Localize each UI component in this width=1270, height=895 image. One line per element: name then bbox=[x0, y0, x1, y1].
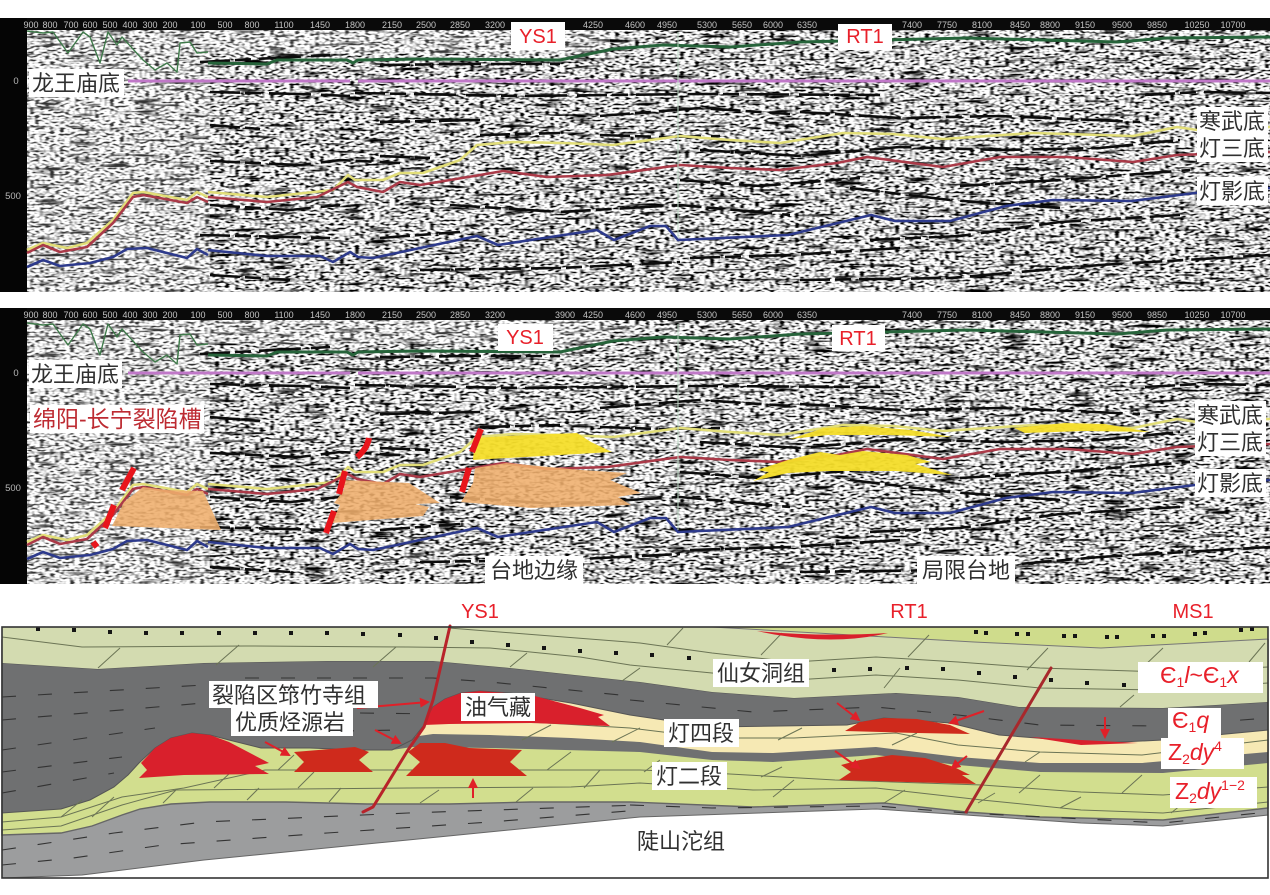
axis numbers lower: 500 bbox=[102, 310, 118, 320]
axis numbers lower: 500 bbox=[217, 310, 233, 320]
lithology lines bbox=[2, 628, 1268, 830]
axis numbers upper: 1100 bbox=[274, 20, 294, 30]
formula: Z2dy4 bbox=[1161, 738, 1244, 769]
label dengsan upper: 灯三底 bbox=[1199, 136, 1265, 161]
migration arrows bbox=[265, 702, 1105, 798]
formula: Z2dy4: 2 bbox=[1182, 751, 1190, 767]
axis numbers upper: 100 bbox=[190, 20, 206, 30]
axis numbers lower: 200 bbox=[162, 310, 178, 320]
formula: Z2dy1-2: Z bbox=[1175, 778, 1189, 804]
axis numbers upper: 7400 bbox=[902, 20, 922, 30]
red fault segments bbox=[93, 429, 481, 547]
formula: Qiongzhusi: 1 bbox=[1189, 719, 1197, 735]
frame bbox=[2, 627, 1268, 878]
axis numbers upper: 6350 bbox=[797, 20, 817, 30]
axis numbers lower: 400 bbox=[122, 310, 138, 320]
label longwangmiao lower: 龙王庙底 bbox=[31, 362, 119, 387]
axis numbers upper: 8450 bbox=[1010, 20, 1030, 30]
axis numbers upper: 10700 bbox=[1220, 20, 1246, 30]
formula: Qiongzhusi: q bbox=[1196, 707, 1209, 733]
label longwangmiao upper: 龙王庙底 bbox=[32, 71, 120, 96]
shale dashes bbox=[2, 678, 1268, 865]
well label YS1 lower: YS1 bbox=[506, 327, 544, 349]
well label YS1 upper bbox=[511, 22, 565, 50]
axis numbers lower: 800 bbox=[244, 310, 260, 320]
well label MS1 section: MS1 bbox=[1172, 601, 1214, 623]
axis numbers upper: 4950 bbox=[657, 20, 677, 30]
label hanwu lower: 寒武底 bbox=[1197, 403, 1263, 428]
axis numbers lower: 4600 bbox=[625, 310, 645, 320]
well label RT1 upper bbox=[838, 24, 892, 50]
label xiannvdong: 仙女洞组 bbox=[717, 661, 805, 686]
axis numbers lower: 8100 bbox=[972, 310, 992, 320]
label deng 2: 灯二段 bbox=[656, 764, 722, 789]
label doushantuo: 陡山沱组 bbox=[637, 829, 725, 854]
axis numbers upper: 1450 bbox=[310, 20, 330, 30]
label dengying upper: 灯影底 bbox=[1199, 179, 1265, 204]
axis numbers upper: 9850 bbox=[1147, 20, 1167, 30]
axis numbers upper: 200 bbox=[162, 20, 178, 30]
formula: Cambrian upper: l bbox=[1184, 662, 1190, 688]
axis numbers lower: 4950 bbox=[657, 310, 677, 320]
formula: Cambrian upper: 1 bbox=[1219, 674, 1227, 690]
axis numbers lower: 10250 bbox=[1184, 310, 1210, 320]
sandstone dots bbox=[36, 627, 1254, 687]
axis numbers upper: 500 bbox=[217, 20, 233, 30]
well label YS1 section: YS1 bbox=[461, 601, 499, 623]
axis numbers lower: 7400 bbox=[902, 310, 922, 320]
layer: Deng 4 cream bbox=[412, 640, 1268, 763]
axis numbers lower: 5300 bbox=[697, 310, 717, 320]
axis numbers upper: 5650 bbox=[732, 20, 752, 30]
axis numbers lower: 2500 bbox=[416, 310, 436, 320]
axis numbers upper: 900 bbox=[23, 20, 39, 30]
axis numbers upper: 9500 bbox=[1112, 20, 1132, 30]
axis numbers upper: 6000 bbox=[763, 20, 783, 30]
layer: Xiannvdong light olive bbox=[2, 627, 1268, 708]
axis numbers lower: 6000 bbox=[763, 310, 783, 320]
axis numbers lower: 10700 bbox=[1220, 310, 1246, 320]
formula: Z2dy4: Z bbox=[1168, 739, 1182, 765]
label hanwu upper: 寒武底 bbox=[1199, 109, 1265, 134]
layer: Qiongzhusi dark shale bbox=[2, 661, 1268, 813]
axis numbers upper: 700 bbox=[63, 20, 79, 30]
panel: lower seismic profile with interpretation bbox=[0, 308, 1270, 584]
formula: Z2dy1-2 bbox=[1170, 777, 1257, 808]
layer: top green bbox=[712, 627, 1268, 648]
formula: Z2dy1-2: dy bbox=[1197, 778, 1223, 804]
layer: thin dark shale bbox=[392, 640, 1268, 773]
label restricted platform: 局限台地 bbox=[922, 558, 1010, 583]
label source rock: 裂陷区筇竹寺组 bbox=[212, 683, 366, 708]
axis numbers upper: 800 bbox=[244, 20, 260, 30]
axis numbers upper: 7750 bbox=[937, 20, 957, 30]
axis numbers upper: 4600 bbox=[625, 20, 645, 30]
seismic horizons upper bbox=[27, 31, 1270, 267]
axis numbers upper: 2500 bbox=[416, 20, 436, 30]
axis numbers lower: 700 bbox=[63, 310, 79, 320]
formula: Cambrian upper: 1 bbox=[1177, 674, 1185, 690]
axis numbers lower: 1800 bbox=[345, 310, 365, 320]
axis numbers lower: 5650 bbox=[732, 310, 752, 320]
axis numbers lower: 2850 bbox=[450, 310, 470, 320]
axis numbers upper: 3200 bbox=[485, 20, 505, 30]
axis numbers lower: 4250 bbox=[583, 310, 603, 320]
formula: Z2dy4: dy bbox=[1190, 739, 1216, 765]
axis numbers upper: 800 bbox=[42, 20, 58, 30]
label dengying lower: 灯影底 bbox=[1197, 471, 1263, 496]
formula: Z2dy1-2: 2 bbox=[1189, 790, 1197, 806]
panel: upper seismic profile bbox=[0, 18, 1270, 292]
formula: Qiongzhusi: Є bbox=[1172, 707, 1189, 733]
axis numbers lower: 9850 bbox=[1147, 310, 1167, 320]
label mianyang-changning trough: 绵阳-长宁裂陷槽 bbox=[33, 406, 202, 432]
axis numbers lower: 8450 bbox=[1010, 310, 1030, 320]
formula: Z2dy4: 4 bbox=[1214, 738, 1222, 754]
axis numbers lower: 3900 bbox=[555, 310, 575, 320]
axis numbers upper: 400 bbox=[122, 20, 138, 30]
axis numbers lower: 0 bbox=[13, 368, 19, 379]
axis numbers lower: 9500 bbox=[1112, 310, 1132, 320]
layer: Deng 2 green bbox=[2, 640, 1268, 835]
formula: Z2dy1-2: 1−2 bbox=[1221, 777, 1245, 793]
yellow reservoir bodies bbox=[473, 423, 1150, 481]
label source rock: 优质烃源岩 bbox=[235, 710, 345, 735]
axis numbers upper: 2150 bbox=[382, 20, 402, 30]
axis numbers upper: 500 bbox=[5, 191, 21, 202]
axis numbers upper: 8800 bbox=[1040, 20, 1060, 30]
label reservoir: 油气藏 bbox=[465, 695, 531, 720]
axis numbers upper: 300 bbox=[142, 20, 158, 30]
axis numbers upper: 0 bbox=[13, 76, 19, 87]
orange reef bodies bbox=[112, 463, 641, 530]
axis numbers upper: 10250 bbox=[1184, 20, 1210, 30]
axis numbers lower: 100 bbox=[190, 310, 206, 320]
axis numbers upper: 8100 bbox=[972, 20, 992, 30]
axis numbers upper bbox=[5, 20, 1246, 202]
well label RT1 section: RT1 bbox=[890, 601, 928, 623]
axis numbers lower: 300 bbox=[142, 310, 158, 320]
axis numbers lower: 2150 bbox=[382, 310, 402, 320]
axis numbers lower: 800 bbox=[42, 310, 58, 320]
axis numbers upper: 9150 bbox=[1075, 20, 1095, 30]
axis numbers upper: 4250 bbox=[583, 20, 603, 30]
axis numbers lower: 7750 bbox=[937, 310, 957, 320]
axis numbers upper: 500 bbox=[102, 20, 118, 30]
label dengsan lower: 灯三底 bbox=[1197, 430, 1263, 455]
axis numbers upper: 5300 bbox=[697, 20, 717, 30]
axis numbers lower: 900 bbox=[23, 310, 39, 320]
axis numbers lower: 1100 bbox=[274, 310, 294, 320]
axis numbers upper: 2850 bbox=[450, 20, 470, 30]
label source rock bbox=[209, 681, 378, 736]
axis numbers upper: 600 bbox=[82, 20, 98, 30]
axis numbers lower: 8800 bbox=[1040, 310, 1060, 320]
formula: Qiongzhusi bbox=[1168, 707, 1221, 738]
label platform margin: 台地边缘 bbox=[490, 558, 578, 583]
well label YS1 lower bbox=[498, 324, 553, 351]
formula: Cambrian upper bbox=[1138, 662, 1263, 693]
well label RT1 lower: RT1 bbox=[839, 328, 877, 350]
hydrocarbon reservoirs bbox=[139, 631, 1138, 784]
well label RT1 lower bbox=[832, 325, 885, 351]
well label YS1 upper: YS1 bbox=[519, 26, 557, 48]
axis numbers lower: 9150 bbox=[1075, 310, 1095, 320]
fault lines bbox=[363, 626, 1051, 812]
axis numbers upper: 1800 bbox=[345, 20, 365, 30]
formula: Cambrian upper: x bbox=[1226, 662, 1240, 688]
layer: Doushantuo grey bbox=[2, 780, 1268, 878]
axis numbers lower: 600 bbox=[82, 310, 98, 320]
axis numbers lower: 6350 bbox=[797, 310, 817, 320]
axis numbers lower: 1450 bbox=[310, 310, 330, 320]
axis numbers lower: 3200 bbox=[485, 310, 505, 320]
panel: geological cross section bbox=[2, 626, 1268, 878]
axis numbers lower bbox=[5, 310, 1246, 494]
formula: Cambrian upper: Є bbox=[1160, 662, 1177, 688]
seismic horizons lower bbox=[27, 323, 1270, 559]
formula: Cambrian upper: ~Є bbox=[1189, 662, 1219, 688]
axis numbers lower: 500 bbox=[5, 483, 21, 494]
well label RT1 upper: RT1 bbox=[846, 26, 884, 48]
label deng 4: 灯四段 bbox=[668, 721, 734, 746]
